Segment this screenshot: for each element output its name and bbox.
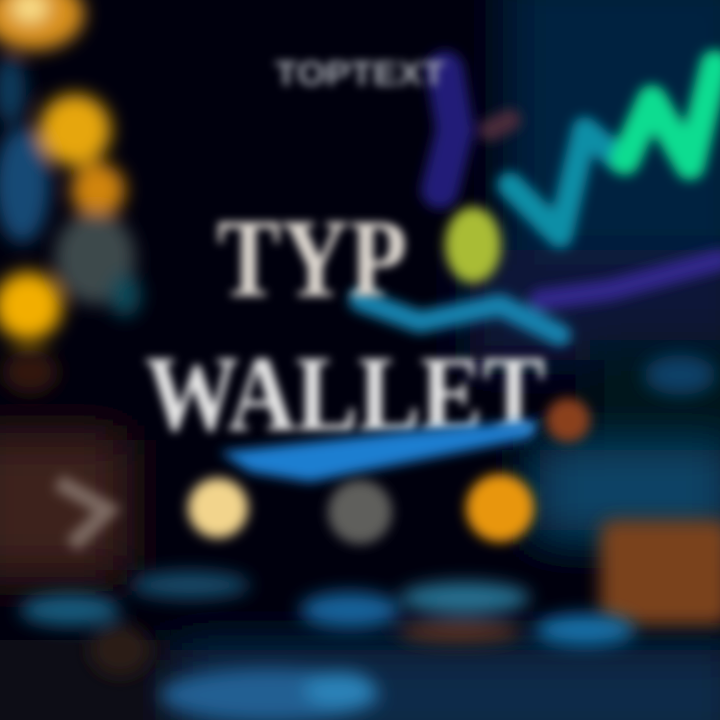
arrow icon bbox=[58, 482, 108, 545]
title: WALLET: WALLET bbox=[145, 335, 545, 454]
green coin bbox=[445, 207, 501, 283]
blue underline swoosh bbox=[220, 420, 540, 482]
small heading: TOPTEXT bbox=[275, 55, 445, 93]
rising chart line bbox=[360, 65, 720, 335]
left glowing coins bbox=[0, 0, 141, 394]
coin row bbox=[188, 474, 534, 544]
orange dot by title bbox=[546, 398, 590, 442]
title: TYP: TYP bbox=[217, 197, 407, 321]
bottom platforms bbox=[20, 355, 716, 720]
coffee cup bbox=[600, 520, 720, 625]
